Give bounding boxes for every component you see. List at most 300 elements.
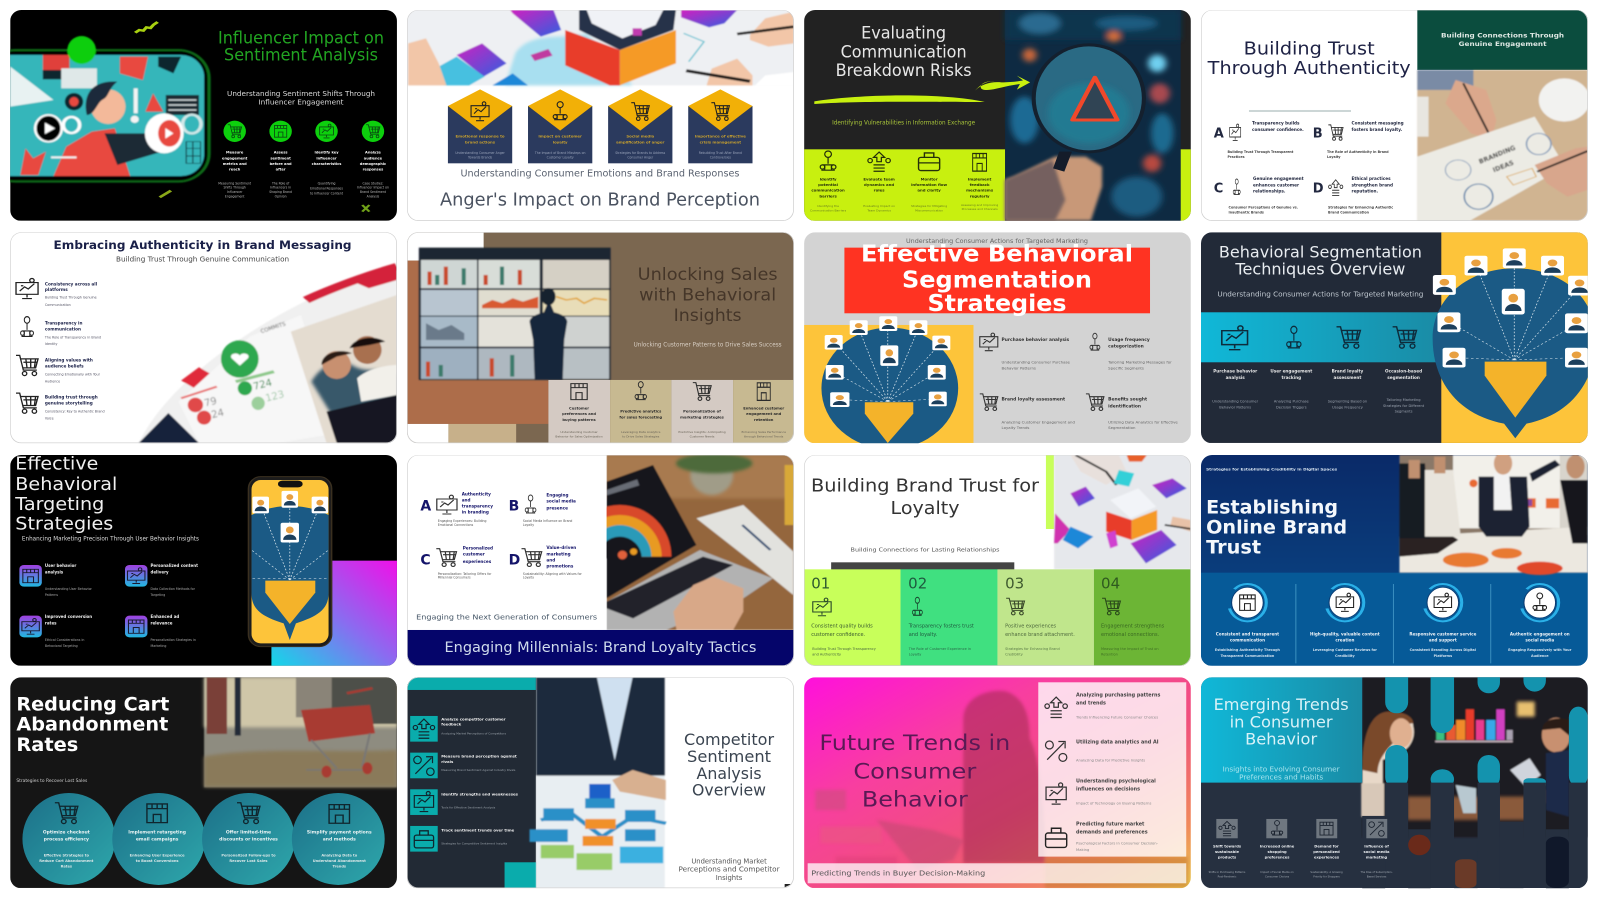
item: ad relevance: relevance bbox=[151, 621, 173, 626]
translucent item panel bbox=[1038, 682, 1186, 857]
item: emotional response: Towards Brands bbox=[467, 156, 493, 160]
item labels: experiences bbox=[1314, 856, 1340, 860]
item labels: characteristics bbox=[312, 162, 341, 166]
item labels: feedback bbox=[970, 182, 990, 187]
item labels: Implement bbox=[968, 176, 991, 181]
item 3 bbox=[1409, 584, 1477, 658]
item D: Sustainability: Aligning with Values for bbox=[523, 572, 583, 576]
item: storytelling: Voice bbox=[45, 416, 54, 420]
item: benefits sought: identification bbox=[1108, 403, 1141, 409]
item D bbox=[509, 545, 583, 580]
item 2: email campaigns bbox=[136, 836, 179, 842]
item labels: products bbox=[1218, 856, 1237, 860]
item C: enhances customer bbox=[1253, 182, 1300, 187]
teal capsules bbox=[1385, 653, 1588, 789]
title: Influencer Impact on bbox=[218, 29, 384, 49]
item C: Personalization: Tailoring Offers for bbox=[438, 572, 492, 576]
item labels: marketing bbox=[1366, 856, 1388, 860]
subtitle: Insights into Evolving Consumer bbox=[1223, 765, 1340, 773]
item: user behavior bbox=[19, 563, 93, 597]
item C: Millennial Consumers bbox=[438, 576, 471, 580]
item labels: preferences bbox=[1265, 856, 1290, 860]
item descriptions: Strategies for Mitigating bbox=[911, 204, 947, 208]
photo: branding ideas notebook: IDEAS bbox=[1492, 159, 1515, 174]
photo: abandoned shopping cart bbox=[204, 677, 397, 787]
item labels: communication bbox=[811, 188, 845, 193]
item: brand loyalty: Analyzing Customer Engagement and bbox=[1002, 419, 1075, 424]
panel: Embracing Authenticity in Brand Messaging bbox=[10, 232, 397, 443]
photo: team around board bbox=[1399, 452, 1588, 575]
photo: magnifying glass bbox=[1005, 10, 1181, 221]
item D: reputation. bbox=[1352, 189, 1379, 194]
title: Trust bbox=[1206, 537, 1261, 558]
title: Behavior bbox=[1245, 730, 1318, 749]
title: Insights bbox=[674, 306, 742, 325]
subtitle: Building Connections Through bbox=[1441, 31, 1564, 39]
title: Breakdown Risks bbox=[836, 61, 972, 81]
item D: Loyalty bbox=[523, 576, 534, 580]
item: social media: Consumer Anger bbox=[627, 156, 654, 160]
item labels: audience bbox=[364, 156, 383, 160]
item: personalized content: delivery bbox=[151, 570, 169, 575]
item 4: Analyzing Data to bbox=[321, 853, 358, 857]
item: benefits sought: Segmentation bbox=[1108, 425, 1136, 430]
item labels: influencer bbox=[316, 156, 337, 160]
item 4: Engaging Responsively with Your bbox=[1508, 648, 1572, 652]
title bbox=[684, 730, 774, 800]
photo: woman with tablet overlay bbox=[815, 691, 1188, 888]
item labels bbox=[1213, 369, 1422, 380]
item descriptions: Opinion bbox=[275, 195, 287, 199]
item tiles: Predictive analytics bbox=[620, 409, 662, 413]
item 1 bbox=[410, 716, 506, 742]
item descriptions: Influencers in bbox=[270, 186, 291, 190]
item: brand loyalty: Loyalty Trends bbox=[1002, 425, 1029, 430]
item 2 bbox=[1045, 739, 1159, 763]
item: customer loyalty bbox=[528, 89, 592, 163]
column 01: Building Trust Through Transparency bbox=[812, 647, 876, 651]
subtitle: Strategies for Establishing Credibility in Digital Spaces bbox=[1206, 468, 1337, 472]
item labels: Analyze bbox=[365, 151, 381, 155]
caption band bbox=[808, 863, 1186, 883]
column 01 bbox=[804, 569, 901, 666]
item labels: Purchase behavior bbox=[1213, 369, 1258, 374]
item C: customer bbox=[463, 552, 486, 557]
item A: Transparency builds bbox=[1252, 121, 1300, 126]
item: conversion rates: Improved conversion bbox=[45, 614, 92, 619]
item: personalized content: Targeting bbox=[150, 593, 165, 597]
title: Communication bbox=[841, 42, 967, 62]
subtitle: Understanding Consumer Emotions and Brand Responses bbox=[460, 169, 740, 180]
title: Anger's Impact on Brand Perception bbox=[440, 190, 760, 211]
item D: Value-driven bbox=[546, 545, 576, 550]
item: consistency: Consistency across all bbox=[45, 281, 98, 286]
subtitle bbox=[1442, 32, 1564, 48]
title: Emerging Trends bbox=[1214, 695, 1349, 714]
dark capsules bbox=[1362, 783, 1588, 889]
item 1: communication bbox=[1230, 638, 1265, 643]
subtitle bbox=[228, 90, 374, 106]
item: conversion rates: rates bbox=[45, 621, 57, 626]
item: crisis management bbox=[688, 89, 753, 163]
gradient block bbox=[271, 561, 397, 666]
item descriptions: Team Dynamics bbox=[866, 209, 891, 213]
item: purchase behavior bbox=[980, 333, 1071, 370]
title: Behavioral Segmentation bbox=[1219, 242, 1422, 261]
item 2: creation bbox=[1335, 638, 1354, 643]
item descriptions: Shifts Through bbox=[224, 186, 246, 190]
item labels: personalized bbox=[1313, 850, 1340, 854]
photo: couple with glowing chart bbox=[1361, 677, 1588, 837]
title: Establishing bbox=[1206, 497, 1338, 518]
item: user behavior: Understanding User Behavior bbox=[45, 587, 93, 591]
item labels: demographic bbox=[360, 162, 386, 166]
item: ad relevance: Enhanced ad bbox=[151, 614, 179, 619]
item: purchase behavior: Understanding Consumer Purchase bbox=[1002, 359, 1071, 364]
item descriptions: Identifying the bbox=[817, 204, 839, 208]
item labels: Monitor bbox=[921, 176, 938, 181]
item D bbox=[1313, 176, 1393, 214]
item: crisis management: Controversies bbox=[710, 156, 731, 160]
item labels: mechanisms bbox=[966, 188, 994, 193]
panel: Effective Behavioral Segmentation Strategies bbox=[804, 232, 1191, 449]
item 3: Tools for Effective Sentiment Analysis bbox=[440, 806, 496, 810]
column 03: Positive experiences bbox=[1005, 624, 1057, 630]
item: transparency: communication bbox=[45, 326, 81, 331]
item 1: Reduce Cart Abandonment bbox=[39, 859, 94, 863]
red title block bbox=[844, 248, 1150, 313]
item A: and bbox=[462, 498, 471, 503]
column 04: Measuring the Impact of Trust on bbox=[1101, 647, 1159, 651]
item 4: and methods bbox=[323, 836, 356, 842]
column 02: Transparency fosters trust bbox=[908, 624, 974, 630]
title: Analysis bbox=[697, 764, 762, 783]
item 4 bbox=[292, 793, 385, 885]
title: Segmentation bbox=[902, 267, 1092, 293]
item: purchase behavior: Purchase behavior analysis bbox=[1002, 337, 1069, 343]
panel: Anger's Impact on Brand Perception bbox=[407, 10, 794, 221]
item descriptions: Engagement bbox=[225, 195, 245, 199]
arrow: lime brush stroke bbox=[814, 76, 1030, 104]
item descriptions: Understanding Consumer bbox=[1212, 400, 1259, 404]
item 4: Trends bbox=[333, 865, 346, 869]
subtitle: Understanding Consumer Actions for Targeted Marketing bbox=[1217, 290, 1423, 298]
subtitle: Unlocking Customer Patterns to Drive Sales Success bbox=[634, 342, 782, 348]
item: benefits sought bbox=[1086, 394, 1178, 430]
title: Unlocking Sales bbox=[638, 265, 778, 284]
item labels: responses bbox=[363, 168, 383, 172]
title: Building Brand Trust for bbox=[811, 477, 1040, 497]
column 01: customer confidence. bbox=[811, 632, 866, 638]
item 1: Analyzing Market Perceptions of Competitors bbox=[441, 731, 506, 735]
item 4: social media bbox=[1525, 638, 1554, 643]
item: social media bbox=[608, 89, 672, 163]
item labels: Brand loyalty bbox=[1332, 369, 1363, 374]
item D: marketing bbox=[546, 551, 571, 556]
column 03: Credibility bbox=[1005, 653, 1023, 657]
title: Engaging Millennials: Brand Loyalty Tactics bbox=[444, 640, 756, 656]
title block bbox=[1201, 677, 1362, 783]
green header block bbox=[1417, 10, 1588, 70]
item B bbox=[509, 492, 576, 527]
item 3: Impact of Technology on Buying Patterns bbox=[1076, 802, 1151, 806]
item 2: Leveraging Customer Reviews for bbox=[1313, 648, 1377, 652]
item descriptions: Miscommunication bbox=[915, 209, 943, 213]
item D: strengthen brand bbox=[1352, 182, 1393, 187]
item B: Loyalty bbox=[523, 523, 534, 527]
item descriptions bbox=[1209, 870, 1393, 879]
item: purchase behavior: Behavior Patterns bbox=[1002, 365, 1036, 370]
photo: branding ideas notebook bbox=[1417, 70, 1590, 222]
item 4: demands and preferences bbox=[1076, 829, 1148, 835]
illustration: man with camera bbox=[0, 36, 209, 182]
item 2: Measuring Brand Sentiment Against Industry Rivals bbox=[441, 768, 516, 772]
title bbox=[1207, 39, 1411, 79]
item 1: Consistent and transparent bbox=[1216, 631, 1279, 636]
item: user behavior: analysis bbox=[45, 570, 64, 575]
item 2: Enhancing User Experience bbox=[130, 853, 185, 857]
item B: social media bbox=[546, 499, 576, 504]
subtitle: Engaging the Next Generation of Consumers bbox=[416, 614, 597, 622]
item descriptions: Shaping Brand bbox=[269, 190, 292, 194]
item labels: Assess bbox=[274, 151, 287, 155]
item tiles: Enhancing Sales Performance bbox=[742, 430, 786, 434]
item labels: Evaluate team bbox=[863, 176, 895, 181]
item labels: assessment bbox=[1334, 375, 1361, 380]
title bbox=[819, 731, 1010, 812]
title: Loyalty bbox=[891, 499, 960, 519]
item: storytelling: Consistency: Key to Authentic Brand bbox=[45, 410, 105, 414]
item labels: barriers bbox=[819, 193, 837, 198]
icon tiles bbox=[1216, 819, 1387, 838]
item: emotional response: Understanding Consumer Anger bbox=[455, 151, 506, 155]
item 2: Implement retargeting bbox=[128, 829, 186, 835]
item C: Personalized bbox=[463, 546, 493, 551]
item labels: Influence of bbox=[1364, 844, 1389, 848]
item tiles bbox=[548, 380, 794, 443]
item 1: Transparent Communication bbox=[1221, 654, 1275, 658]
item: user behavior: User behavior bbox=[45, 563, 76, 568]
item 4: Track sentiment trends over time bbox=[441, 827, 515, 832]
title: Techniques Overview bbox=[1234, 259, 1405, 278]
item labels bbox=[222, 151, 386, 172]
title: Targeting bbox=[14, 494, 104, 515]
item: storytelling: Building trust through bbox=[45, 395, 98, 400]
column 02: 02 bbox=[908, 574, 927, 592]
item B: B bbox=[1313, 127, 1323, 142]
item 2: Analyzing Data for Predictive Insights bbox=[1076, 759, 1145, 763]
column 04: Engagement strengthens bbox=[1101, 624, 1165, 630]
title: Behavioral bbox=[15, 474, 117, 495]
subtitle: Understanding Market bbox=[691, 857, 767, 865]
title: Online Brand bbox=[1206, 517, 1347, 538]
item: transparency: Transparency in bbox=[45, 320, 82, 325]
item 1: feedback bbox=[441, 722, 462, 727]
title bbox=[861, 242, 1133, 317]
item labels: sentiment bbox=[270, 156, 291, 160]
item: crisis management: Rebuilding Trust After Brand bbox=[699, 151, 742, 155]
panel: Emerging Trends in Consumer Behavior bbox=[1201, 653, 1588, 889]
item A: in branding bbox=[462, 510, 489, 515]
item 2: Utilizing data analytics and AI bbox=[1076, 739, 1159, 745]
item: conversion rates: Behavioral Targeting bbox=[45, 644, 78, 648]
title bbox=[14, 453, 117, 534]
title bbox=[638, 265, 778, 325]
item 2: High-quality, valuable content bbox=[1310, 631, 1380, 636]
item descriptions: Assessing and Improving bbox=[961, 203, 998, 207]
item C: C bbox=[420, 552, 431, 568]
item 1 bbox=[1215, 584, 1281, 658]
item D: Strategies for Enhancing Authentic bbox=[1328, 205, 1393, 209]
item labels: before and bbox=[270, 162, 292, 166]
item labels: segmentation bbox=[1387, 375, 1420, 380]
item: emotional response bbox=[448, 89, 512, 163]
item labels: social media bbox=[1364, 850, 1390, 854]
icons row bbox=[820, 151, 987, 171]
item descriptions: Usage Frequency bbox=[1332, 406, 1364, 410]
item B: fosters brand loyalty. bbox=[1352, 127, 1403, 132]
panel: Influencer Impact on Sentiment Analysis bbox=[0, 10, 397, 221]
item 3 bbox=[410, 789, 519, 815]
title: with Behavioral bbox=[639, 285, 776, 304]
caption band: Predicting Trends in Buyer Decision-Making bbox=[811, 869, 986, 878]
item 4 bbox=[1508, 584, 1572, 658]
item: personalized content bbox=[125, 563, 198, 597]
panel: Future Trends in Consumer Behavior bbox=[804, 677, 1191, 888]
title: Abandonment bbox=[16, 714, 168, 736]
item: personalized content: Personalized content bbox=[151, 563, 198, 568]
item tiles: through Behavioral Trends bbox=[744, 435, 784, 439]
subtitle: Enhancing Marketing Precision Through User Behavior Insights bbox=[22, 537, 199, 543]
item labels: Identify bbox=[820, 176, 837, 181]
item 1: Trends Influencing Future Consumer Choices bbox=[1075, 716, 1158, 720]
item: transparency: Identity bbox=[45, 342, 58, 346]
item labels: Demand for bbox=[1314, 844, 1339, 848]
item tiles: to Drive Sales Strategies bbox=[622, 435, 660, 439]
item 1: Establishing Authenticity Through bbox=[1215, 648, 1281, 652]
item: values: Connecting Emotionally with Your bbox=[45, 372, 101, 376]
item labels: engagement bbox=[222, 156, 248, 160]
subtitle: Strategies to Recover Lost Sales bbox=[16, 778, 87, 783]
title: Embracing Authenticity in Brand Messaging bbox=[54, 238, 352, 252]
item A: Authenticity bbox=[462, 492, 491, 497]
item 3: Personalized Follow-ups to bbox=[221, 853, 276, 857]
item descriptions: Shifts in Purchasing Patterns bbox=[1209, 870, 1246, 874]
item: benefits sought: Benefits sought bbox=[1108, 397, 1147, 403]
item D: D bbox=[509, 552, 520, 568]
decoration: squiggles bbox=[135, 22, 369, 212]
item descriptions: Behavior Patterns bbox=[1219, 406, 1251, 410]
column 04: 04 bbox=[1101, 574, 1120, 592]
item descriptions: Case Studies: bbox=[362, 181, 383, 185]
item 4 bbox=[410, 826, 515, 852]
item 3: and support bbox=[1429, 638, 1457, 643]
title: in Consumer bbox=[1230, 712, 1333, 731]
teal icon band bbox=[1201, 312, 1441, 362]
panel: Building Brand Trust for Loyalty bbox=[804, 455, 1191, 666]
item labels: after bbox=[276, 168, 286, 172]
title: Building Trust bbox=[1244, 39, 1375, 59]
item A: A bbox=[1214, 127, 1224, 142]
photo: brand cards and box bbox=[407, 10, 794, 85]
panel: Engaging Millennials: Brand Loyalty Tactics bbox=[407, 453, 794, 666]
item tiles: engagement and bbox=[746, 412, 782, 416]
item labels: Identify key bbox=[315, 151, 339, 155]
item descriptions: Post-Pandemic bbox=[1218, 875, 1237, 879]
item B bbox=[1313, 121, 1404, 159]
item 3: discounts or incentives bbox=[219, 836, 278, 842]
title: Sentiment Analysis bbox=[224, 45, 378, 65]
item: emotional response: brand actions bbox=[465, 139, 496, 144]
item: social media: Social media bbox=[626, 134, 655, 139]
subtitle: Preferences and Habits bbox=[1239, 774, 1324, 782]
item labels: regularly bbox=[970, 193, 990, 198]
item descriptions: The Rise of Subscription- bbox=[1360, 870, 1393, 874]
item descriptions bbox=[810, 204, 998, 212]
item: crisis management: Importance of effective bbox=[695, 134, 746, 139]
item labels: User engagement bbox=[1270, 369, 1312, 374]
item: usage frequency bbox=[1090, 333, 1172, 370]
item descriptions: Based Services bbox=[1367, 875, 1387, 879]
item: values bbox=[16, 355, 101, 383]
item: usage frequency: categorization bbox=[1108, 344, 1144, 350]
item labels: potential bbox=[818, 182, 838, 187]
subtitle: Genuine Engagement bbox=[1459, 40, 1547, 48]
item 4: Understand Abandonment bbox=[313, 859, 366, 863]
item descriptions: Segments bbox=[1395, 410, 1413, 414]
item descriptions: Priority for Shoppers bbox=[1313, 875, 1340, 879]
item: customer loyalty: Customer Loyalty bbox=[547, 156, 574, 160]
item 1 bbox=[1045, 692, 1160, 720]
column 02: Loyalty bbox=[909, 653, 921, 657]
item labels: shopping bbox=[1267, 850, 1287, 854]
subtitle: Understanding Consumer Actions for Targeted Marketing bbox=[906, 237, 1088, 245]
item: ad relevance: Marketing bbox=[151, 644, 166, 648]
item: social media: Strategies for Brands to Address bbox=[615, 151, 666, 155]
subtitle: Influencer Engagement bbox=[259, 98, 344, 107]
item descriptions: Processes and Channels bbox=[962, 207, 998, 211]
item tiles: retention bbox=[754, 418, 774, 422]
subtitle: Understanding Sentiment Shifts Through bbox=[227, 89, 375, 98]
item: crisis management: crisis management bbox=[700, 139, 741, 144]
title bbox=[16, 694, 169, 756]
item A: Engaging Experiences: Building bbox=[438, 519, 486, 523]
subtitle: Building Trust Through Genuine Communication bbox=[116, 256, 289, 264]
item: storytelling bbox=[16, 393, 105, 420]
item labels bbox=[811, 176, 994, 198]
item B: Loyalty bbox=[1327, 155, 1341, 159]
item: personalized content: Data Collection Methods for bbox=[151, 587, 196, 591]
item 2: to Boost Conversions bbox=[136, 859, 179, 863]
column 03: Strategies for Enhancing Brand bbox=[1005, 647, 1060, 651]
title bbox=[1214, 695, 1349, 749]
item descriptions: The Role of bbox=[271, 181, 290, 185]
subtitle: Building Connections for Lasting Relationships bbox=[851, 548, 1000, 554]
item descriptions: Decision Triggers bbox=[1276, 406, 1307, 410]
item descriptions: Strategies for Different bbox=[1383, 404, 1425, 408]
title: Evaluating bbox=[861, 23, 946, 43]
item 1 bbox=[22, 793, 115, 885]
item tiles: Leveraging Data Analytics bbox=[621, 430, 661, 434]
title: Reducing Cart bbox=[16, 694, 169, 716]
item 2: rivals bbox=[441, 759, 454, 764]
item 3: Understanding psychological bbox=[1076, 778, 1156, 784]
photo: social media card: 123 bbox=[264, 389, 286, 405]
panel: Effective Behavioral Targeting Strategies bbox=[10, 453, 397, 666]
item tiles: Customer bbox=[569, 406, 589, 410]
subtitle: Insights bbox=[716, 874, 743, 882]
item descriptions: Consumer Choices bbox=[1265, 875, 1290, 879]
